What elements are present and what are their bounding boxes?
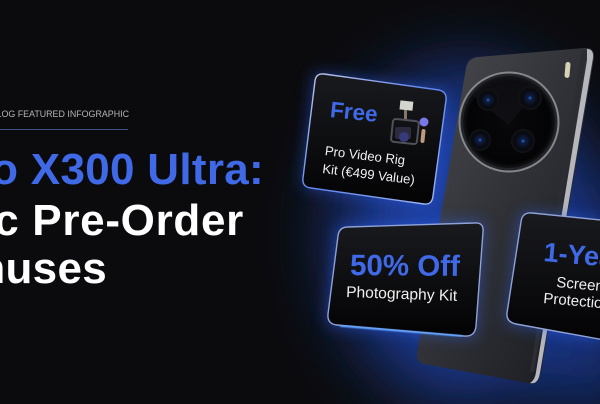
free description line 1: Pro Video Rig — [324, 143, 406, 168]
bottom edge highlight — [340, 326, 462, 336]
card: 50% off — [328, 223, 483, 336]
free description line 2: Kit (€499 Value) — [322, 161, 416, 187]
phone — [417, 48, 594, 384]
offer description: Photography Kit — [346, 284, 458, 305]
icon: video rig — [391, 100, 428, 144]
lens bottom right — [511, 129, 535, 153]
card: free video rig — [303, 74, 446, 204]
card: 1-year screen protection — [507, 213, 600, 341]
free heading: Free — [329, 97, 379, 127]
lens top right — [518, 86, 542, 110]
lens top left — [477, 89, 499, 111]
card glows — [303, 73, 600, 340]
eyebrow underline — [0, 129, 128, 130]
camera module — [458, 72, 560, 172]
offer heading: 50% Off — [350, 249, 460, 283]
lens bottom left — [469, 129, 491, 151]
phone side rail — [530, 49, 593, 383]
background blue glow — [340, 70, 600, 404]
title — [0, 145, 264, 293]
phone flash — [564, 62, 571, 78]
